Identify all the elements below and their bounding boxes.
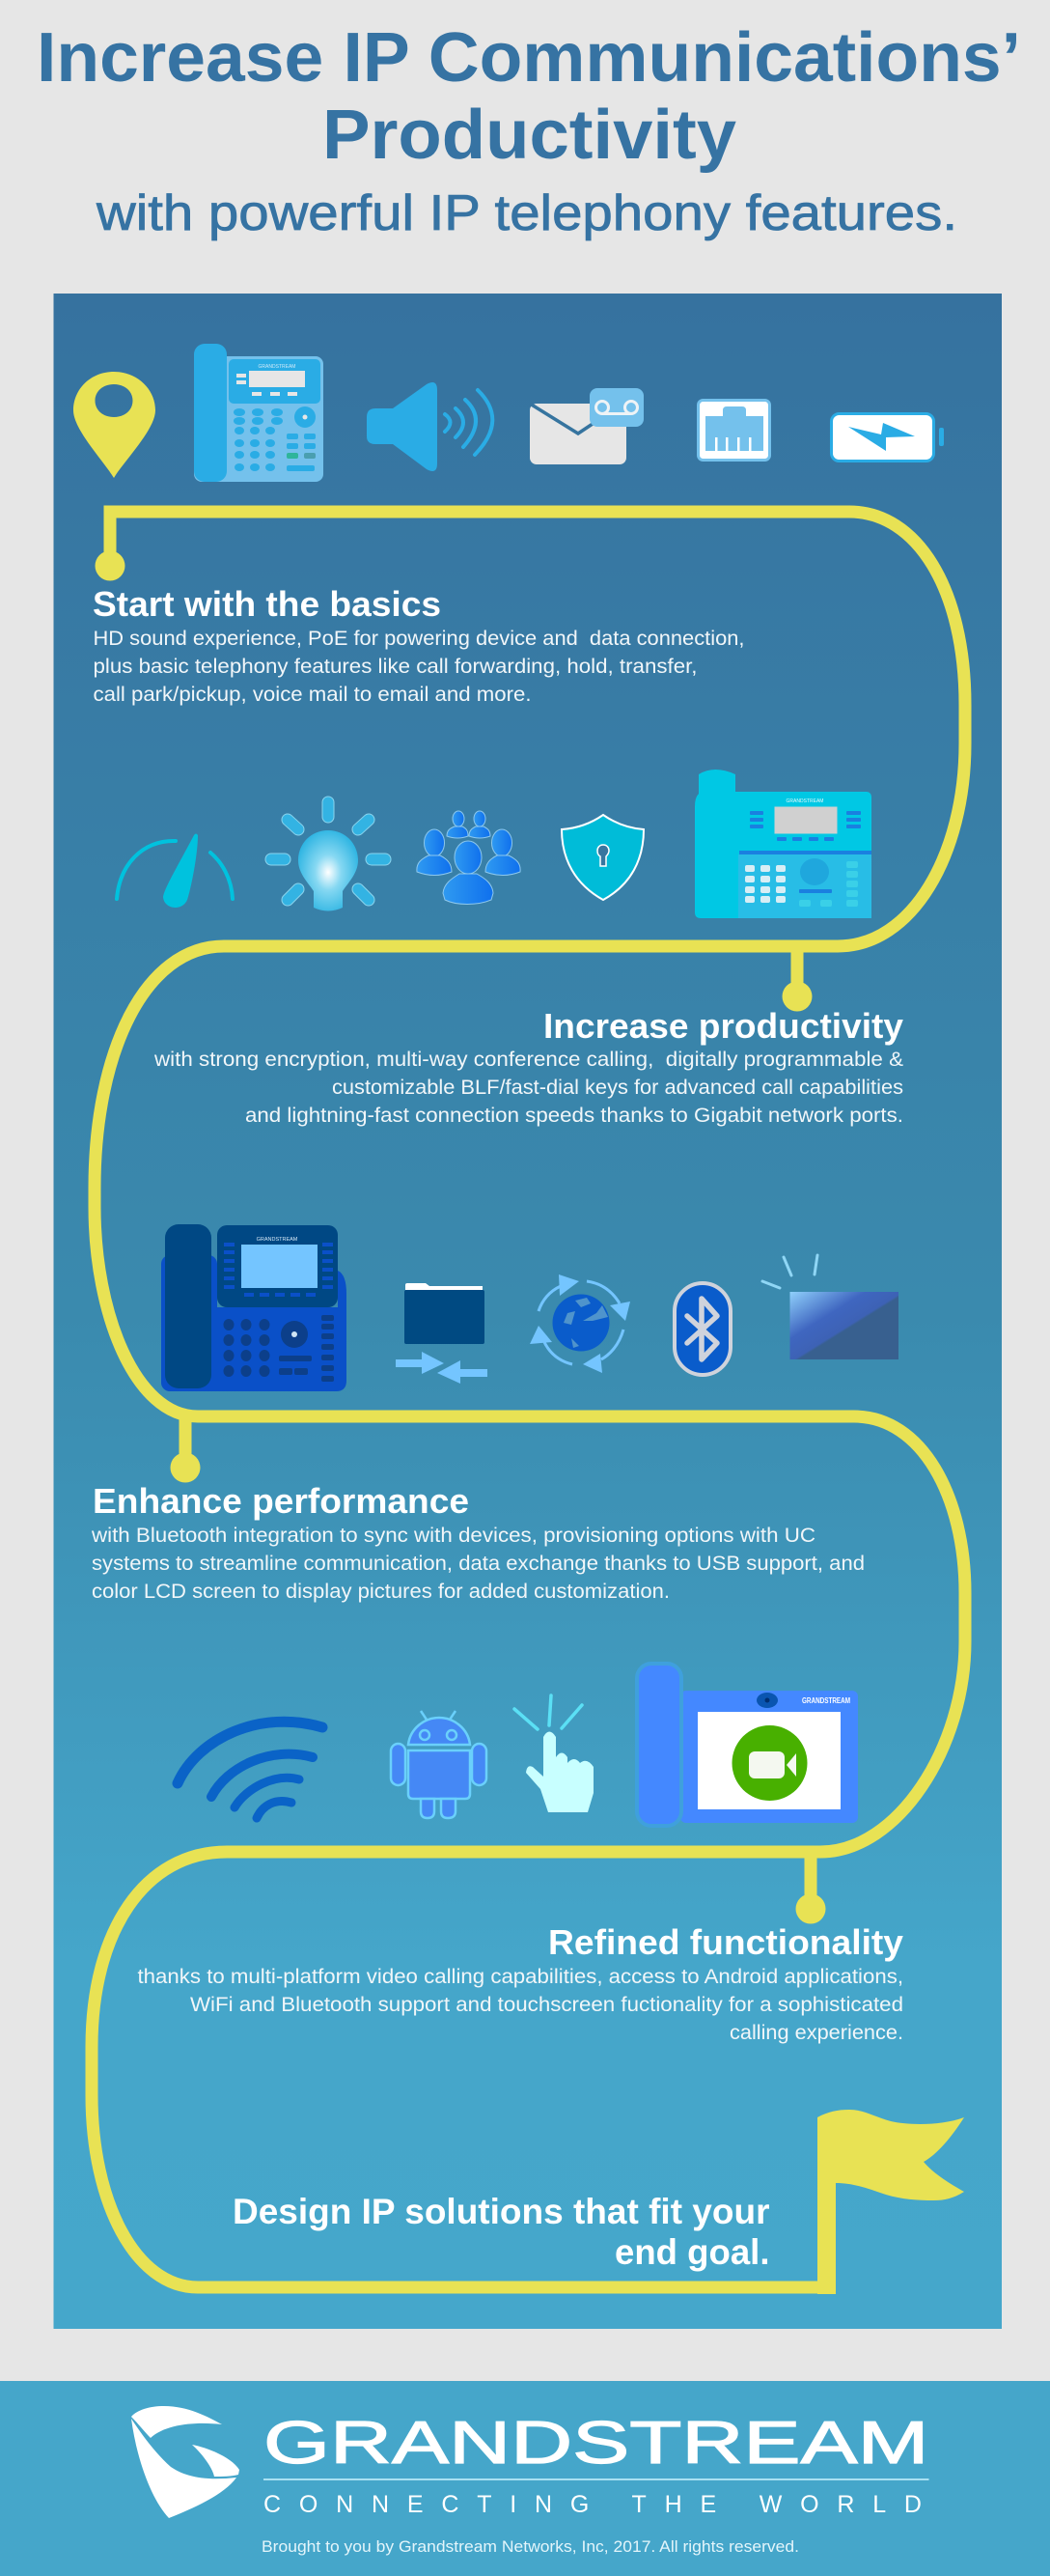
section: enhance performance: Enhance performance [93,1481,469,1521]
section: start with the basics [93,584,745,706]
icon: battery charging [832,413,944,462]
icon: desk phone, cyan [695,770,871,918]
section: increase productivity [153,1006,903,1127]
section: start with the basics: Start with the basics [93,584,441,624]
section: refined functionality: calling experience. [730,2022,903,2044]
section: start with the basics: HD sound experience, PoE for powering device and data connection, [93,628,745,650]
icon: desk phone, light blue: GRANDSTREAM [259,364,295,370]
icon: bluetooth [675,1283,731,1375]
icon: LCD screen [762,1255,898,1359]
path dots [95,550,826,1923]
tagline: CONNECTING THE WORLD [263,2491,922,2518]
subtitle: with powerful IP telephony features. [96,185,957,241]
icon: conference group [417,811,520,904]
panel: footer band [0,2381,1050,2576]
icon: light bulb [271,802,385,911]
icon: touch hand [514,1695,594,1812]
icon: security shield [562,815,644,900]
section: refined functionality: Refined functionality [548,1922,903,1962]
section: enhance performance: systems to streamline communication, data exchange thanks to USB support, and [92,1553,865,1575]
title: Increase IP Communications’ [37,19,1021,97]
section: refined functionality: WiFi and Bluetooth support and touchscreen fuctionality for a sophisticated [190,1994,903,2016]
closing message [233,2192,770,2272]
section: enhance performance: color LCD screen to display pictures for added customization. [92,1581,670,1603]
icon: video phone: GRANDSTREAM [802,1696,850,1705]
icon: desk phone, dark blue: GRANDSTREAM [257,1237,298,1243]
icon: android robot [391,1711,486,1818]
icon: ethernet port [699,400,770,460]
icon: folder data exchange [396,1283,487,1384]
section: enhance performance: with Bluetooth integration to sync with devices, provisioning options with UC [91,1525,815,1547]
section: increase productivity: with strong encryption, multi-way conference calling, digitally programmable & [153,1049,903,1071]
section: enhance performance [91,1481,865,1603]
icon: desk phone, dark blue [161,1224,346,1391]
icon: globe with sync arrows [530,1274,630,1373]
brand name: GRANDSTREAM [263,2410,928,2477]
icon: wifi [178,1722,322,1818]
icon: video phone [637,1664,858,1826]
closing message: end goal. [615,2232,770,2272]
footer credit: Brought to you by Grandstream Networks, Inc, 2017. All rights reserved. [262,2538,799,2556]
section: refined functionality [137,1922,903,2044]
yellow journey path [92,512,965,2287]
icon: voicemail envelope [530,388,644,464]
divider line [263,2478,928,2480]
section: start with the basics: call park/pickup, voice mail to email and more. [93,684,531,706]
icon: desk phone, light blue [194,344,323,482]
title: Productivity [322,97,736,174]
icon: speed gauge [117,834,233,908]
icon: desk phone, cyan: GRANDSTREAM [787,798,823,804]
section: increase productivity: and lightning-fast connection speeds thanks to Gigabit network ports. [245,1105,903,1127]
icon: Grandstream logo [131,2406,239,2518]
title [37,19,1021,174]
section: start with the basics: plus basic telephony features like call forwarding, hold, transfer, [93,656,697,678]
icon: speaker [367,382,492,471]
section: increase productivity: Increase productivity [543,1006,903,1046]
section: increase productivity: customizable BLF/fast-dial keys for advanced call capabilities [332,1077,903,1099]
panel: main gradient background [54,294,1002,2329]
icon: finish flag [817,2110,964,2294]
icon: location pin [73,372,155,478]
section: refined functionality: thanks to multi-platform video calling capabilities, access to Android applications, [137,1966,903,1988]
closing message: Design IP solutions that fit your [233,2192,770,2231]
